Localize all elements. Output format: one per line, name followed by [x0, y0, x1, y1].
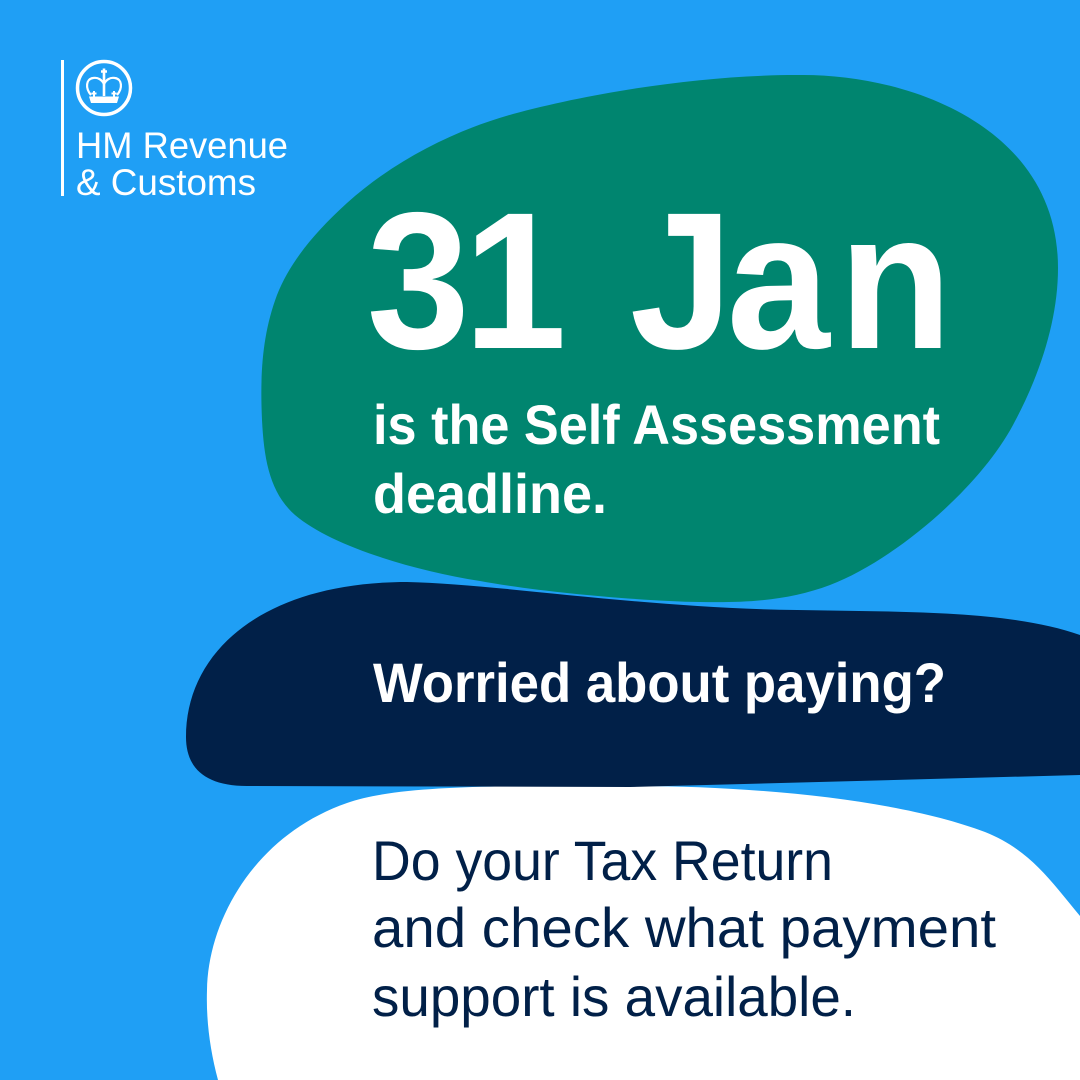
panel: navy blob — [186, 582, 1080, 787]
text block: call to action: support is available. — [372, 965, 856, 1028]
panel: white blob — [207, 786, 1080, 1080]
text block: call to action: and check what payment — [372, 896, 996, 959]
logo wordmark — [76, 125, 288, 203]
text block: worried about paying: Worried about paying? — [373, 651, 946, 714]
logo wordmark: HM Revenue — [76, 125, 288, 166]
logo wordmark: & Customs — [76, 162, 256, 203]
logo: HM Revenue & Customs — [61, 60, 288, 203]
text block: call to action: Do your Tax Return — [372, 829, 833, 892]
text block: call to action — [372, 829, 996, 1028]
logo divider line — [61, 60, 64, 196]
text block: deadline statement: deadline. — [373, 462, 607, 525]
panel: green blob — [261, 75, 1058, 602]
icon: crown in circle — [78, 62, 130, 114]
text block: deadline statement — [373, 393, 940, 525]
heading: 31 Jan: 31 Jan — [367, 173, 952, 390]
text block: deadline statement: is the Self Assessment — [373, 393, 940, 456]
